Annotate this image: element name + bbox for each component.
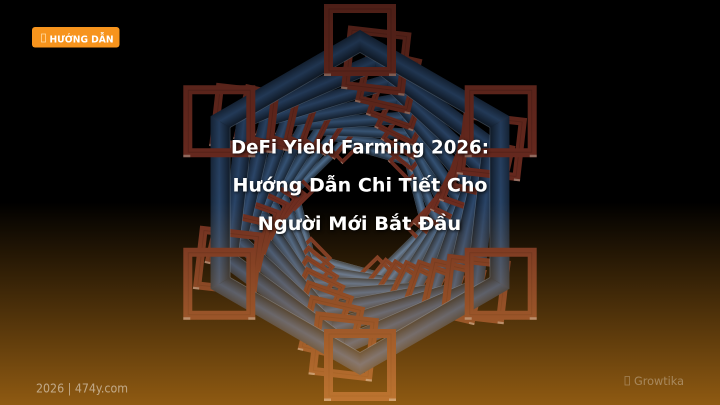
tunnel ring 3 (151, 1, 569, 405)
tunnel ring 4 (164, 13, 556, 398)
title: Người Mới Bắt Đầu (258, 214, 461, 235)
title: DeFi Yield Farming 2026: (231, 137, 489, 158)
category badge (32, 27, 120, 48)
tunnel ring 8 (innermost) (228, 77, 492, 342)
footer year and site: 2026 | 474y.com (36, 382, 128, 396)
top dark shading (0, 0, 720, 203)
tunnel ring 5 (179, 27, 541, 386)
tunnel ring 2 (141, 0, 579, 405)
title (231, 137, 489, 235)
tunnel ring 7 (211, 60, 509, 357)
title: Hướng Dẫn Chi Tiết Cho (232, 175, 488, 197)
tunnel ring 1 (outermost with six square frames) (136, 0, 584, 405)
tunnel ring 6 (194, 43, 526, 372)
hexagonal spiral tunnel illustration (136, 0, 584, 405)
watermark brand: Growtika (634, 374, 684, 388)
category badge: HƯỚNG DẪN (50, 31, 114, 46)
